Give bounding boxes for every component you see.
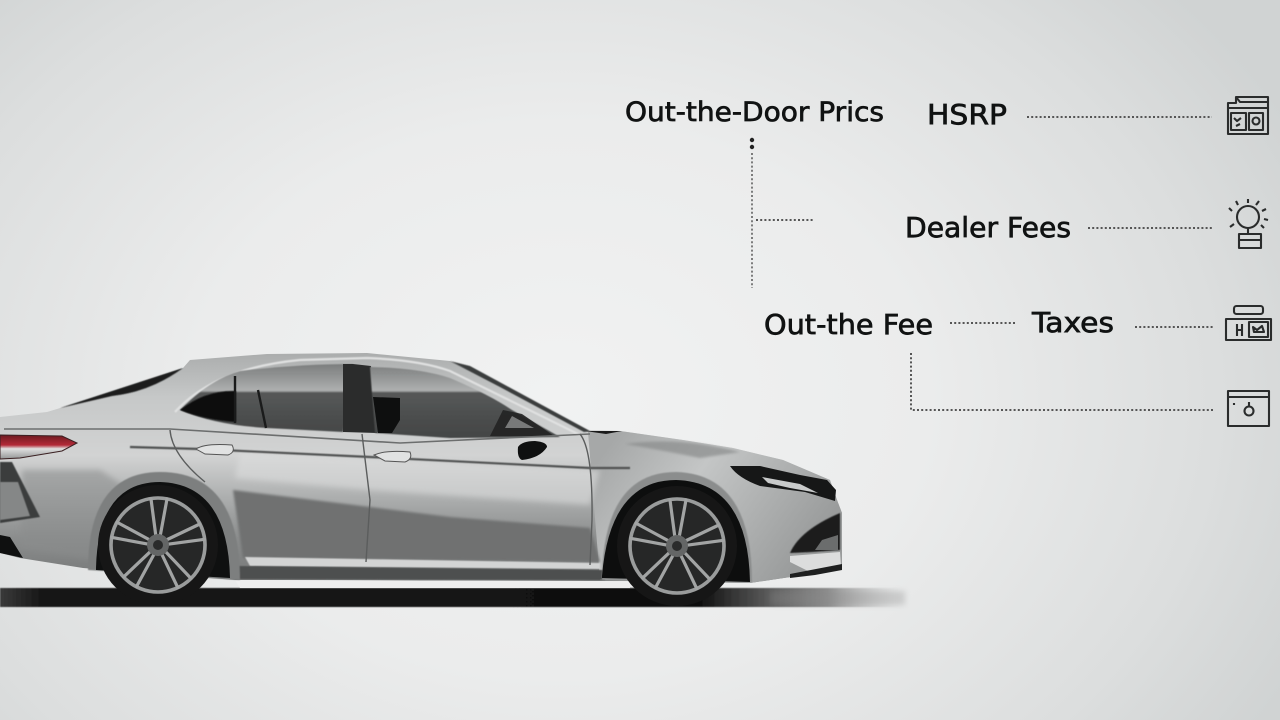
heading: out-the-door price: Out-the-Door Prics	[625, 97, 884, 128]
sill dark band	[235, 566, 605, 580]
B pillar	[343, 364, 377, 433]
connector: lower elbow	[911, 353, 1213, 410]
label: dealer fees: Dealer Fees	[905, 211, 1071, 244]
headlight	[730, 466, 836, 501]
label: out-the fee: Out-the Fee	[764, 308, 933, 341]
roof chrome line	[175, 358, 580, 435]
front glass reflection	[490, 410, 554, 436]
connector: dealer fees	[1088, 227, 1212, 229]
front wheel	[617, 486, 737, 606]
rear wheel	[98, 485, 218, 605]
connector: branch	[756, 219, 813, 221]
quarter glass black	[180, 391, 236, 422]
upper body highlight	[235, 452, 600, 505]
front lip	[790, 552, 841, 572]
belt line	[4, 429, 590, 443]
rear window divider	[235, 376, 266, 428]
ground shadow	[0, 588, 905, 607]
seat silhouette	[373, 397, 400, 433]
white sill strip	[235, 580, 630, 588]
icon: tax box	[1226, 306, 1271, 340]
rear wheel arch	[88, 472, 240, 580]
hood fold shadow	[625, 441, 740, 458]
rear door handle	[196, 444, 233, 455]
rocker highlight	[245, 557, 600, 569]
wiper	[585, 431, 622, 434]
tail light	[0, 435, 77, 459]
rear bumper highlight	[0, 482, 30, 520]
door seams	[170, 430, 592, 565]
rear quarter lower shade	[20, 470, 130, 560]
connector: out-the fee to taxes	[950, 322, 1016, 324]
side mirror	[518, 441, 547, 460]
door crease	[130, 447, 630, 468]
label: taxes: Taxes	[1031, 306, 1114, 339]
label: HSRP: HSRP	[927, 98, 1007, 131]
rear window	[60, 368, 183, 408]
front wheel arch	[602, 472, 752, 582]
rear door window	[180, 364, 353, 432]
windshield	[450, 361, 590, 432]
front door window	[370, 367, 560, 438]
car: silver sedan side view	[0, 353, 842, 606]
icon: browser window with coin	[1228, 391, 1269, 426]
connector: HSRP	[1027, 116, 1212, 118]
lower door shadow panel	[233, 490, 600, 562]
fog lamp detail	[815, 535, 838, 550]
icon: light bulb with sparks	[1229, 199, 1268, 248]
car body shell	[0, 353, 842, 583]
front grille	[790, 513, 840, 553]
rear lower bumper	[0, 535, 23, 558]
connector: main vertical	[750, 138, 754, 288]
hood and front fender	[588, 431, 842, 583]
front door handle	[374, 451, 411, 462]
rear bumper recess	[0, 462, 40, 523]
connector: taxes	[1135, 326, 1213, 328]
icon: documents folder	[1228, 97, 1268, 134]
